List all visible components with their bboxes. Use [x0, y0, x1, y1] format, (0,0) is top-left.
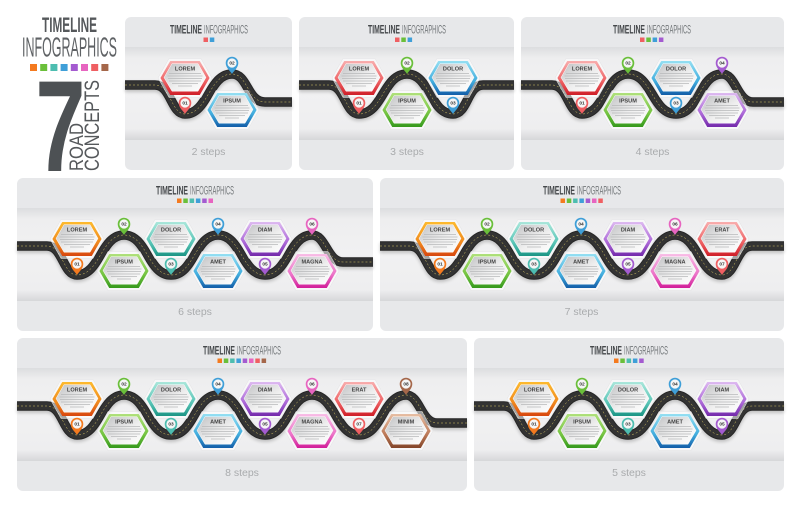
pin 04	[575, 218, 587, 235]
pin 02: 02	[625, 61, 631, 67]
step hexagon: AMET	[554, 252, 608, 290]
pin 04: 04	[672, 382, 678, 388]
pin 02: 02	[121, 222, 127, 228]
label: ROAD: ROAD	[67, 123, 88, 171]
step hexagon: DOLOR: DOLOR	[443, 66, 463, 72]
road	[17, 235, 373, 277]
panel title	[156, 186, 234, 198]
panel title	[203, 346, 281, 358]
step hexagon: DIAM	[601, 220, 655, 258]
step hexagon: LOREM	[50, 380, 104, 418]
caption: 7 steps	[565, 306, 598, 318]
panel title: TIMELINE	[543, 186, 575, 198]
pin 01: 01	[182, 101, 188, 107]
pin 04	[212, 378, 224, 395]
pin 07	[353, 418, 365, 435]
step hexagon: DOLOR: DOLOR	[524, 228, 544, 234]
pin 04	[716, 57, 728, 74]
step hexagon: LOREM: LOREM	[572, 66, 592, 72]
step hexagon: MAGNA	[648, 252, 702, 290]
step hexagon: AMET	[695, 90, 749, 130]
panel: 2 steps	[125, 17, 292, 170]
panel title: INFOGRAPHICS	[204, 24, 248, 36]
step hexagon: AMET: AMET	[573, 260, 590, 266]
step hexagon: DOLOR	[601, 380, 655, 418]
step hexagon: DOLOR: DOLOR	[618, 388, 638, 394]
colour squares	[395, 38, 412, 42]
step hexagon: DOLOR	[144, 380, 198, 418]
step hexagon: AMET: AMET	[714, 98, 731, 104]
step hexagon: IPSUM: IPSUM	[115, 260, 133, 266]
pin 02	[481, 218, 493, 235]
step hexagon: DOLOR: DOLOR	[161, 228, 181, 234]
pin 06	[669, 218, 681, 235]
step hexagon: IPSUM: IPSUM	[223, 98, 241, 104]
pin 05: 05	[262, 422, 268, 428]
pin 03: 03	[168, 422, 174, 428]
panel title: TIMELINE	[203, 346, 235, 358]
pin 06	[306, 378, 318, 395]
step hexagon: IPSUM: IPSUM	[398, 98, 416, 104]
panel title	[590, 346, 668, 358]
panel title: INFOGRAPHICS	[402, 24, 446, 36]
pin 01	[71, 418, 83, 435]
step hexagon: MINIM	[379, 412, 433, 450]
panel title: INFOGRAPHICS	[624, 346, 668, 358]
step hexagon: IPSUM: IPSUM	[478, 260, 496, 266]
pin 02: 02	[579, 382, 585, 388]
pin 05	[259, 258, 271, 275]
caption: 3 steps	[390, 146, 424, 158]
step hexagon: DIAM	[695, 380, 749, 418]
pin 04	[212, 218, 224, 235]
step hexagon: LOREM: LOREM	[430, 228, 450, 234]
step hexagon: MAGNA	[285, 252, 339, 290]
panel title	[368, 24, 446, 36]
step hexagon: LOREM	[555, 58, 609, 98]
pin 08	[400, 378, 412, 395]
pin 03	[670, 97, 682, 114]
panel title: INFOGRAPHICS	[190, 186, 234, 198]
pin 07: 07	[719, 262, 725, 268]
heading: TIMELINE: TIMELINE	[42, 14, 97, 37]
pin 01	[528, 418, 540, 435]
pin 01	[434, 258, 446, 275]
step hexagon: DOLOR	[649, 58, 703, 98]
panel: 4 steps	[521, 17, 784, 170]
caption: 5 steps	[612, 467, 646, 479]
pin 04: 04	[719, 61, 725, 67]
step hexagon: LOREM: LOREM	[524, 388, 544, 394]
pin 03	[165, 418, 177, 435]
step hexagon: ERAT	[332, 380, 386, 418]
colour squares	[640, 38, 663, 42]
step hexagon: MAGNA: MAGNA	[301, 420, 323, 426]
panel title	[170, 24, 248, 36]
panel: 6 steps	[17, 178, 373, 331]
pin 04: 04	[578, 222, 584, 228]
colour squares	[560, 198, 603, 203]
road	[380, 235, 784, 277]
pin 07	[716, 258, 728, 275]
colour squares	[218, 358, 266, 363]
caption: 6 steps	[178, 306, 212, 318]
pin 03	[165, 258, 177, 275]
pin 04: 04	[215, 222, 221, 228]
panel: 7 steps	[380, 178, 784, 331]
step hexagon: IPSUM: IPSUM	[573, 420, 591, 426]
pin 02	[401, 57, 413, 74]
pin 03: 03	[531, 262, 537, 268]
pin 06: 06	[672, 222, 678, 228]
label: CONCEPTS: CONCEPTS	[81, 80, 104, 171]
pin 02	[576, 378, 588, 395]
panel: 5 steps	[474, 338, 784, 491]
pin 05	[622, 258, 634, 275]
pin 03: 03	[450, 101, 456, 107]
step hexagon: DOLOR	[426, 58, 480, 98]
road	[474, 395, 784, 437]
pin 06: 06	[309, 222, 315, 228]
step hexagon: LOREM: LOREM	[67, 388, 87, 394]
step hexagon: MAGNA: MAGNA	[301, 260, 323, 266]
step hexagon: IPSUM: IPSUM	[619, 98, 637, 104]
pin 01	[576, 97, 588, 114]
step hexagon: ERAT: ERAT	[352, 388, 367, 394]
step hexagon: LOREM: LOREM	[175, 66, 195, 72]
pin 01: 01	[579, 101, 585, 107]
step hexagon: LOREM	[413, 220, 467, 258]
step hexagon: MAGNA	[285, 412, 339, 450]
step hexagon: LOREM	[332, 58, 386, 98]
step hexagon: IPSUM	[380, 90, 434, 130]
step hexagon: DIAM: DIAM	[258, 388, 272, 394]
pin 06: 06	[309, 382, 315, 388]
panel title: TIMELINE	[613, 24, 645, 36]
pin 01	[179, 97, 191, 114]
step hexagon: DOLOR: DOLOR	[161, 388, 181, 394]
step hexagon: IPSUM	[97, 412, 151, 450]
road	[17, 395, 467, 437]
pin 05	[259, 418, 271, 435]
pin 02	[622, 57, 634, 74]
panel title: TIMELINE	[590, 346, 622, 358]
step hexagon: AMET	[648, 412, 702, 450]
pin 03	[447, 97, 459, 114]
step hexagon: IPSUM	[601, 90, 655, 130]
step hexagon: LOREM: LOREM	[349, 66, 369, 72]
step hexagon: DOLOR: DOLOR	[666, 66, 686, 72]
panel title: TIMELINE	[368, 24, 400, 36]
step hexagon: DOLOR	[144, 220, 198, 258]
caption: 8 steps	[225, 467, 259, 479]
pin 04	[669, 378, 681, 395]
panel title: INFOGRAPHICS	[577, 186, 621, 198]
pin 01	[353, 97, 365, 114]
pin 07: 07	[356, 422, 362, 428]
step hexagon: ERAT: ERAT	[715, 228, 730, 234]
pin 06	[306, 218, 318, 235]
step hexagon: DIAM: DIAM	[715, 388, 729, 394]
pin 01: 01	[356, 101, 362, 107]
road	[125, 74, 292, 116]
pin 04: 04	[215, 382, 221, 388]
step hexagon: IPSUM	[205, 90, 259, 130]
step hexagon: MAGNA: MAGNA	[664, 260, 686, 266]
step hexagon: MINIM: MINIM	[398, 420, 415, 426]
text: INFOGRAPHICS	[22, 32, 117, 62]
step hexagon: DOLOR	[507, 220, 561, 258]
pin 03	[528, 258, 540, 275]
pin 01: 01	[531, 422, 537, 428]
step hexagon: DIAM	[238, 220, 292, 258]
pin 03: 03	[625, 422, 631, 428]
pin 05	[716, 418, 728, 435]
step hexagon: LOREM	[507, 380, 561, 418]
pin 03: 03	[168, 262, 174, 268]
pin 05: 05	[719, 422, 725, 428]
step hexagon: AMET: AMET	[210, 420, 227, 426]
road	[299, 74, 514, 116]
step hexagon: IPSUM	[97, 252, 151, 290]
pin 01: 01	[74, 422, 80, 428]
pin 03	[622, 418, 634, 435]
step hexagon: DIAM	[238, 380, 292, 418]
panel title: TIMELINE	[170, 24, 202, 36]
pin 02	[118, 218, 130, 235]
pin 01: 01	[74, 262, 80, 268]
colour squares	[204, 38, 214, 42]
pin 01: 01	[437, 262, 443, 268]
step hexagon: AMET	[191, 412, 245, 450]
panel title	[543, 186, 621, 198]
pin 05: 05	[262, 262, 268, 268]
pin 02	[118, 378, 130, 395]
road	[521, 74, 784, 116]
pin 02: 02	[121, 382, 127, 388]
panel: 8 steps	[17, 338, 467, 491]
pin 01	[71, 258, 83, 275]
step hexagon: IPSUM	[460, 252, 514, 290]
panel: 3 steps	[299, 17, 514, 170]
step hexagon: AMET: AMET	[667, 420, 684, 426]
colour squares	[614, 358, 644, 363]
pin 02: 02	[404, 61, 410, 67]
colour legend squares	[30, 64, 108, 71]
main heading block	[22, 14, 117, 199]
step hexagon: IPSUM: IPSUM	[115, 420, 133, 426]
step hexagon: AMET: AMET	[210, 260, 227, 266]
caption: 2 steps	[192, 146, 225, 158]
pin 08: 08	[403, 382, 409, 388]
panel title: TIMELINE	[156, 186, 188, 198]
big number 7: 7	[36, 53, 85, 199]
step hexagon: DIAM: DIAM	[258, 228, 272, 234]
colour squares	[177, 198, 213, 203]
pin 02	[226, 57, 238, 74]
step hexagon: ERAT	[695, 220, 749, 258]
step hexagon: LOREM	[158, 58, 212, 98]
caption: 4 steps	[636, 146, 669, 158]
pin 05: 05	[625, 262, 631, 268]
pin 02: 02	[229, 61, 235, 67]
step hexagon: LOREM: LOREM	[67, 228, 87, 234]
panel title: INFOGRAPHICS	[647, 24, 691, 36]
pin 03: 03	[673, 101, 679, 107]
step hexagon: AMET	[191, 252, 245, 290]
step hexagon: LOREM	[50, 220, 104, 258]
pin 02: 02	[484, 222, 490, 228]
panel title	[613, 24, 691, 36]
step hexagon: DIAM: DIAM	[621, 228, 635, 234]
panel title: INFOGRAPHICS	[237, 346, 281, 358]
step hexagon: IPSUM	[555, 412, 609, 450]
